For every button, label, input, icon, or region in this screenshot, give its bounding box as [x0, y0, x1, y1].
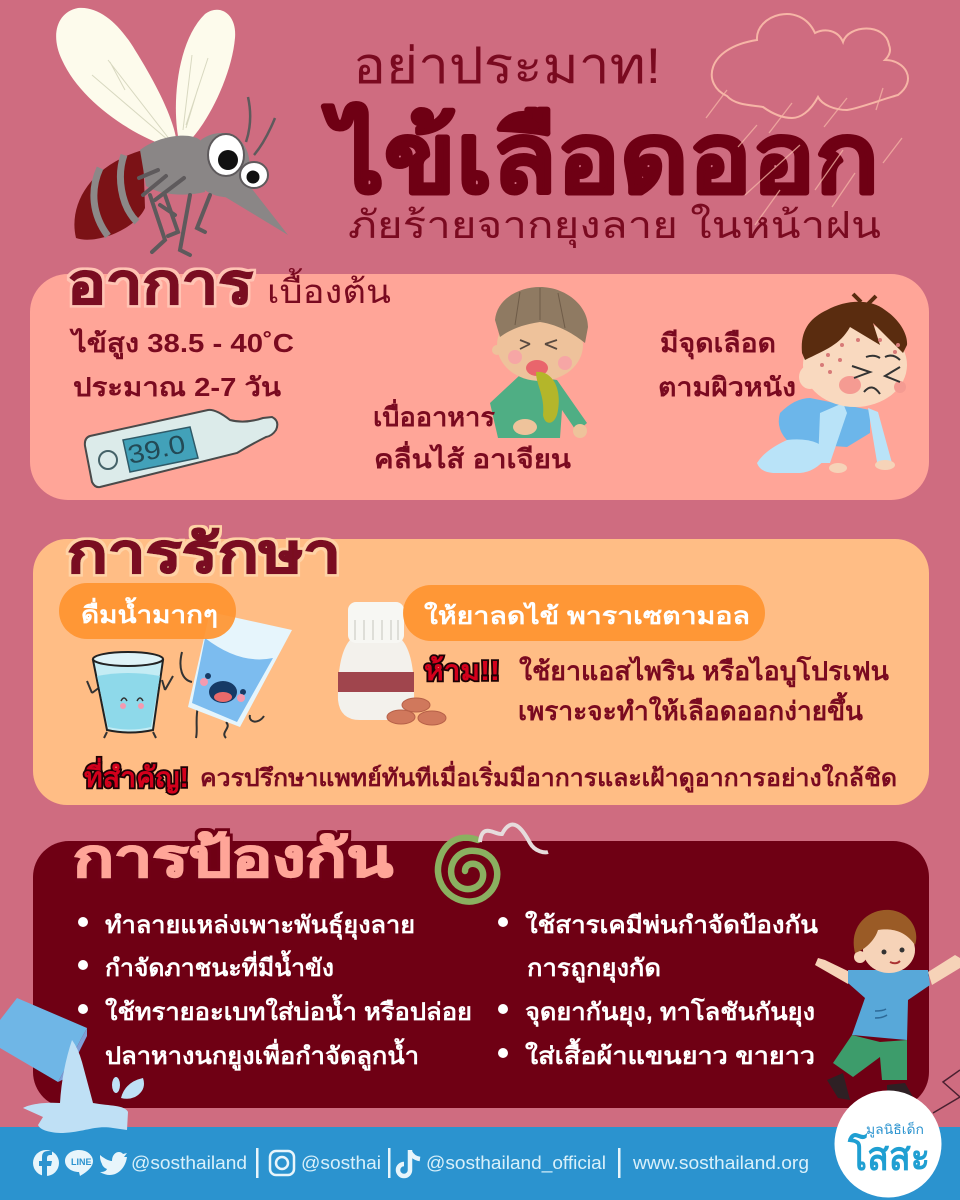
- logo: โสสะ: [847, 1133, 930, 1179]
- panel: prevention: [33, 825, 929, 1108]
- label: drink water: [59, 583, 236, 639]
- handle: facebook: @sosthailand: [131, 1153, 247, 1173]
- title: อย่าประมาท!: [353, 38, 661, 94]
- heading: symptoms: อาการ: [67, 252, 253, 315]
- text: nausea: เบื่ออาหาร: [373, 398, 495, 432]
- label: paracetamol: [403, 585, 765, 641]
- list: right column: การถูกยุงกัด: [527, 955, 661, 984]
- logo: [834, 1090, 942, 1198]
- list: right column: ใส่เสื้อผ้าแขนยาว ขายาว: [525, 1037, 815, 1070]
- list: right column: ใช้สารเคมีพ่นกำจัดป้องกัน: [525, 910, 819, 939]
- panel: treatment: [33, 524, 929, 805]
- icon: mosquito coil: [438, 825, 548, 902]
- text: bleeding spots: มีจุดเลือด: [660, 328, 776, 360]
- text: fever: ไข้สูง 38.5 - 40˚C: [69, 327, 294, 360]
- heading: treatment: การรักษา: [67, 524, 341, 584]
- important note: ที่สำคัญ!: [84, 757, 189, 794]
- heading: symptoms: [67, 252, 391, 315]
- icon: instagram: [270, 1151, 294, 1175]
- list: right column: [498, 910, 819, 1070]
- footer bar: [0, 1127, 960, 1200]
- important note: [84, 757, 897, 794]
- list: right column: จุดยากันยุง, ทาโลชันกันยุง: [525, 997, 815, 1028]
- icon: tiktok: [398, 1150, 420, 1176]
- text: fever: ประมาณ 2-7 วัน: [73, 372, 281, 402]
- warning text: เพราะจะทำให้เลือดออกง่ายขึ้น: [518, 691, 863, 726]
- list: left column: [78, 911, 472, 1071]
- heading: prevention: การป้องกัน: [73, 830, 394, 888]
- heading: symptoms: เบื้องต้น: [267, 268, 391, 310]
- icon: happy glasses: [87, 612, 292, 738]
- label: paracetamol: ให้ยาลดไข้ พาราเซตามอล: [424, 601, 750, 630]
- title: [321, 38, 881, 248]
- title: ภัยร้ายจากยุงลาย ในหน้าฝน: [348, 204, 881, 248]
- panel: symptoms: [30, 252, 929, 500]
- text: fever: [69, 327, 294, 402]
- icons: facebook line twitter: LINE: [71, 1157, 92, 1167]
- website: www.sosthailand.org: [632, 1153, 809, 1173]
- list: left column: ใช้ทรายอะเบทใส่บ่อน้ำ หรือปล่อย: [105, 993, 472, 1026]
- text: nausea: [373, 398, 571, 474]
- icon: thermometer: 39.0: [125, 428, 188, 470]
- text: nausea: คลื่นไส้ อาเจียน: [374, 440, 571, 474]
- list: left column: กำจัดภาชนะที่มีน้ำขัง: [105, 949, 334, 982]
- handle: instagram: @sosthai: [301, 1153, 381, 1173]
- handle: tiktok: @sosthailand_official: [426, 1153, 606, 1174]
- text: bleeding spots: [658, 328, 796, 402]
- title: ไข้เลือดออก: [321, 102, 879, 213]
- text: bleeding spots: ตามผิวหนัง: [658, 372, 796, 402]
- label: drink water: ดื่มน้ำมากๆ: [81, 596, 218, 629]
- list: left column: ทำลายแหล่งเพาะพันธุ์ยุงลาย: [105, 911, 415, 941]
- icon: thermometer: [85, 410, 277, 487]
- logo: มูลนิธิเด็ก: [866, 1120, 924, 1138]
- icon: crawling baby: [757, 294, 907, 473]
- icon: mosquito: [56, 8, 288, 255]
- icon: vomiting child: [490, 287, 588, 438]
- icon: lightning: [933, 1070, 960, 1113]
- icon: rain cloud: [712, 14, 908, 118]
- warning text: ห้าม!!: [424, 655, 500, 686]
- icon: spilled water cup: [0, 998, 144, 1133]
- warning text: ใช้ยาแอสไพริน หรือไอบูโปรเฟน: [519, 655, 889, 688]
- rain lines: [706, 88, 902, 225]
- icons: facebook line twitter: [33, 1150, 127, 1176]
- icon: medicine bottle: [338, 602, 446, 725]
- warning text: [424, 655, 889, 726]
- important note: ควรปรึกษาแพทย์ทันทีเมื่อเริ่มมีอาการและเฝ้าดูอาการอย่างใกล้ชิด: [200, 760, 897, 793]
- icon: happy child: [815, 910, 960, 1100]
- list: left column: ปลาหางนกยูงเพื่อกำจัดลูกน้ำ: [105, 1037, 419, 1071]
